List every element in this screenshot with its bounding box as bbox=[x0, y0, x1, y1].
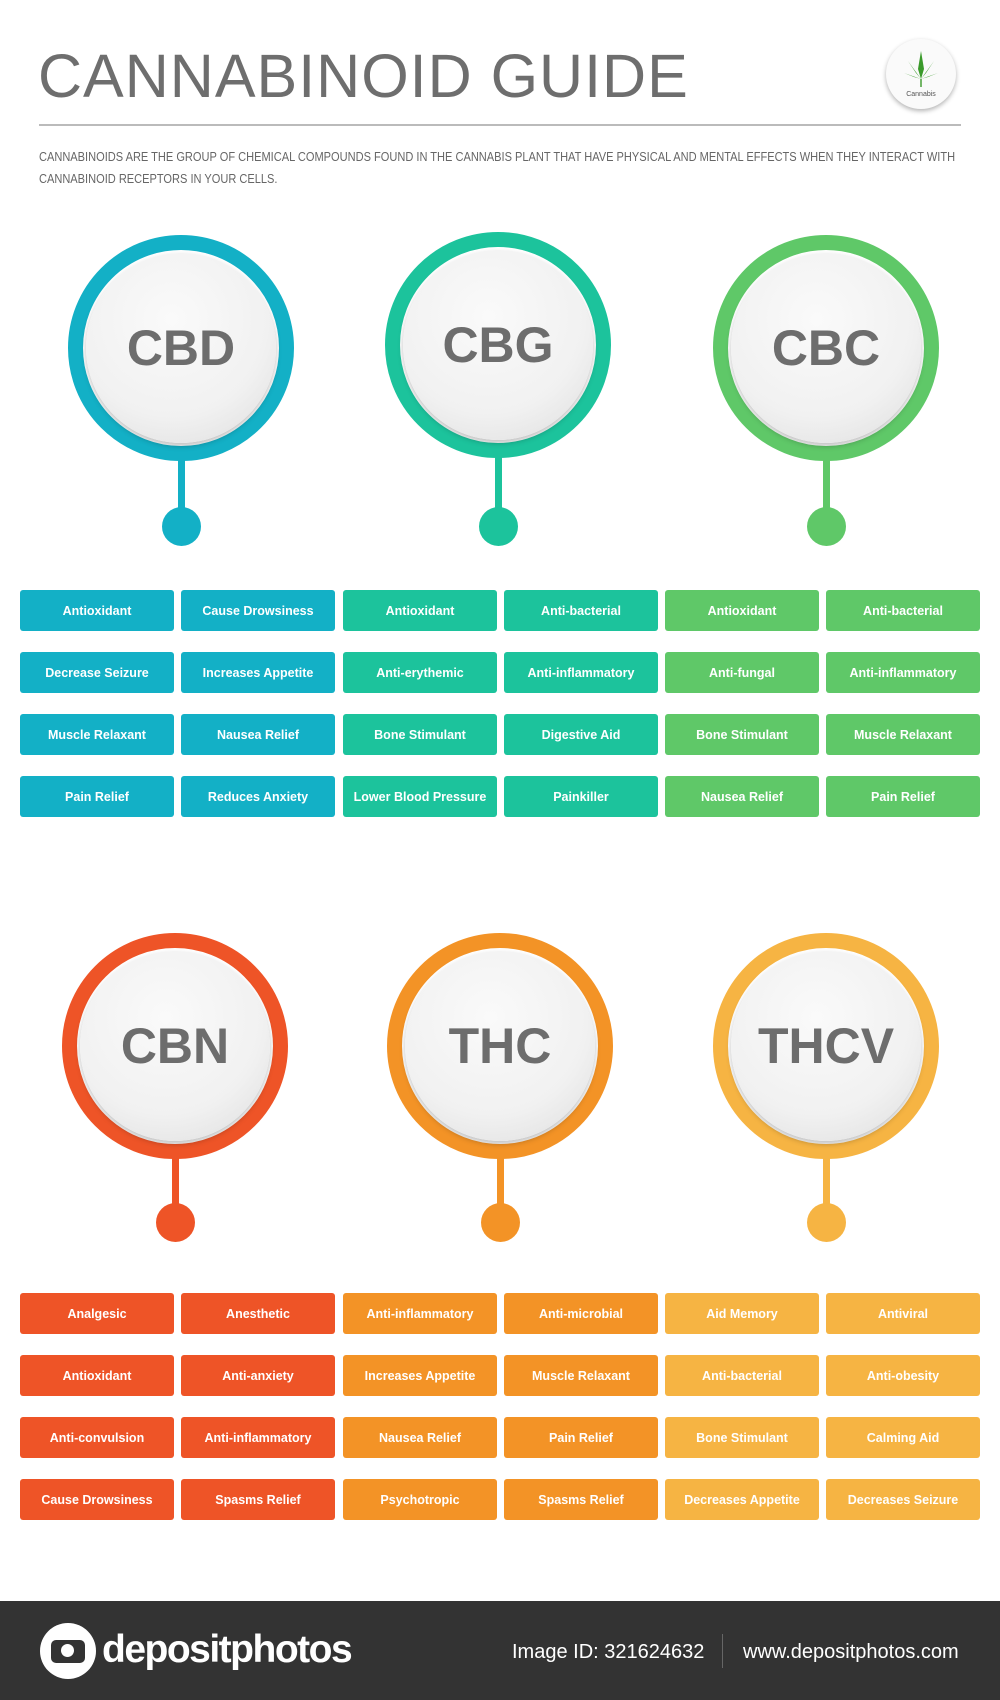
panel: effects row 2: Anti-convulsion bbox=[50, 1430, 144, 1444]
title: CANNABINOID GUIDE bbox=[38, 42, 689, 110]
panel: effects row 2: Decreases Seizure bbox=[848, 1492, 958, 1506]
panel: effects row 2: Antioxidant bbox=[63, 1368, 131, 1382]
pin: CBD: CBD bbox=[127, 320, 235, 376]
panel: effects row 1 bbox=[20, 590, 980, 817]
panel: effects row 2: Anti-anxiety bbox=[222, 1368, 294, 1382]
image id: Image ID: 321624632 bbox=[512, 1641, 704, 1663]
pin: CBC: CBC bbox=[772, 320, 880, 376]
panel: effects row 1: Painkiller bbox=[553, 790, 609, 804]
panel: effects row 1: Anti-bacterial bbox=[541, 604, 621, 618]
panel: effects row 1: Decrease Seizure bbox=[45, 666, 149, 680]
panel: effects row 1: Bone Stimulant bbox=[374, 728, 466, 742]
pin: CBC bbox=[713, 235, 939, 546]
footer brand: depositphotos bbox=[102, 1628, 351, 1671]
panel: effects row 1: Anti-inflammatory bbox=[850, 666, 956, 680]
panel: effects row 2: Anti-bacterial bbox=[702, 1368, 782, 1382]
panel: effects row 1: Nausea Relief bbox=[701, 790, 783, 804]
panel: effects row 1: Lower Blood Pressure bbox=[354, 790, 486, 804]
url: www.depositphotos.com bbox=[743, 1641, 959, 1663]
panel: effects row 1: Nausea Relief bbox=[217, 728, 299, 742]
divider line bbox=[39, 124, 961, 126]
panel: effects row 1: Pain Relief bbox=[871, 790, 935, 804]
panel: effects row 1: Digestive Aid bbox=[542, 728, 620, 742]
panel: effects row 2: Spasms Relief bbox=[215, 1492, 301, 1506]
pin: CBN bbox=[62, 933, 288, 1242]
panel: effects row 1: Muscle Relaxant bbox=[48, 728, 146, 742]
panel: effects row 1: Increases Appetite bbox=[203, 666, 313, 680]
panel: effects row 2: Spasms Relief bbox=[538, 1492, 624, 1506]
pin: CBD bbox=[68, 235, 294, 546]
panel: effects row 2: Calming Aid bbox=[867, 1430, 939, 1444]
panel: effects row 2: Nausea Relief bbox=[379, 1430, 461, 1444]
panel: effects row 2: Anti-inflammatory bbox=[205, 1430, 311, 1444]
panel: effects row 1: Reduces Anxiety bbox=[208, 790, 308, 804]
panel: effects row 2: Analgesic bbox=[67, 1306, 127, 1320]
panel: effects row 1: Anti-erythemic bbox=[376, 666, 464, 680]
panel: effects row 1: Bone Stimulant bbox=[696, 728, 788, 742]
icon: camera logo bbox=[40, 1623, 96, 1679]
panel: effects row 2: Pain Relief bbox=[549, 1430, 613, 1444]
panel: effects row 2: Antiviral bbox=[878, 1306, 928, 1320]
icon: cannabis leaf bbox=[904, 51, 938, 98]
panel: effects row 2: Anti-microbial bbox=[539, 1306, 623, 1320]
pin: THC bbox=[387, 933, 613, 1242]
panel: effects row 2: Muscle Relaxant bbox=[532, 1368, 630, 1382]
logo badge bbox=[886, 39, 956, 109]
panel: effects row 2: Cause Drowsiness bbox=[41, 1492, 153, 1506]
panel: effects row 2: Aid Memory bbox=[706, 1306, 778, 1320]
pin: CBG bbox=[385, 232, 611, 546]
icon: cannabis leaf: Cannabis bbox=[906, 91, 936, 98]
panel: effects row 2: Psychotropic bbox=[380, 1492, 460, 1506]
pin: CBN: CBN bbox=[121, 1018, 229, 1074]
panel: effects row 2 bbox=[20, 1293, 980, 1520]
panel: effects row 1: Muscle Relaxant bbox=[854, 728, 952, 742]
panel: effects row 2: Anesthetic bbox=[226, 1306, 290, 1320]
panel: effects row 2: Decreases Appetite bbox=[684, 1492, 800, 1506]
panel: effects row 1: Anti-bacterial bbox=[863, 604, 943, 618]
pin: CBG: CBG bbox=[442, 317, 554, 373]
footer bbox=[0, 1601, 1000, 1700]
panel: effects row 1: Anti-inflammatory bbox=[528, 666, 634, 680]
panel: effects row 2: Increases Appetite bbox=[365, 1368, 475, 1382]
panel: effects row 1: Antioxidant bbox=[63, 604, 131, 618]
pin: THCV: THCV bbox=[758, 1018, 894, 1074]
pin: THCV bbox=[713, 933, 939, 1242]
panel: effects row 1: Anti-fungal bbox=[709, 666, 775, 680]
panel: effects row 1: Antioxidant bbox=[386, 604, 454, 618]
panel: effects row 1: Antioxidant bbox=[708, 604, 776, 618]
panel: effects row 2: Bone Stimulant bbox=[696, 1430, 788, 1444]
description: CANNABINOIDS ARE THE GROUP OF CHEMICAL COMPOUNDS FOUND IN THE CANNABIS PLANT THAT HAVE PHYSICAL AND MENTAL EFFECTS WHEN THEY INTERACT WITH CANNABINOID RECEPTORS IN YOUR CELLS. bbox=[39, 149, 955, 186]
panel: effects row 1: Cause Drowsiness bbox=[202, 604, 314, 618]
panel: effects row 1: Pain Relief bbox=[65, 790, 129, 804]
pin: THC: THC bbox=[449, 1018, 551, 1074]
panel: effects row 2: Anti-inflammatory bbox=[367, 1306, 473, 1320]
panel: effects row 2: Anti-obesity bbox=[867, 1368, 939, 1382]
